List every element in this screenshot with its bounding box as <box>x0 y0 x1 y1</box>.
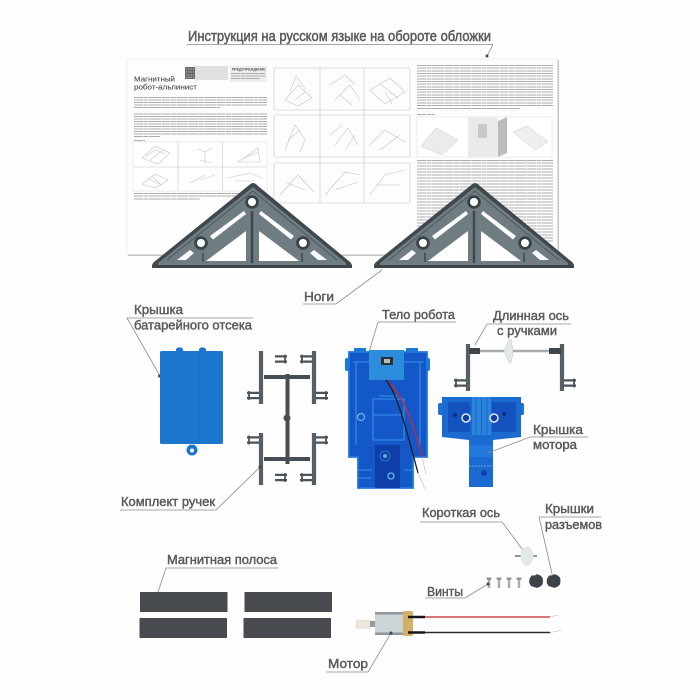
label: magnetic strip: Магнитная полоса <box>167 552 278 567</box>
title: instruction note: Инструкция на русском языке на обороте обложки <box>188 29 491 45</box>
label: robot body <box>369 307 456 352</box>
label: motor cover: мотора <box>533 437 578 452</box>
title: instruction note <box>187 29 493 58</box>
screws <box>486 578 522 588</box>
label: short axle: Короткая ось <box>422 505 500 520</box>
motor cover <box>438 397 524 487</box>
label: long axle with handles: с ручками <box>497 323 557 338</box>
sheet right column text <box>417 66 553 247</box>
label: handle set: Комплект ручек <box>121 494 215 509</box>
sheet left column text <box>134 98 267 199</box>
label: short axle <box>420 505 524 552</box>
label: motor <box>326 632 392 672</box>
label: long axle with handles: Длинная ось <box>493 308 569 323</box>
sheet title: робот-альпинист <box>134 82 198 92</box>
sheet parts grid <box>133 142 267 191</box>
sheet QR code block <box>185 66 228 80</box>
sheet control illustrations <box>417 117 552 157</box>
sheet warning box: ПРЕДУПРЕЖДЕНИЕ <box>232 68 266 72</box>
instruction sheet panel <box>127 59 559 256</box>
label: motor: Мотор <box>328 656 368 671</box>
sheet assembly steps grid <box>274 68 410 203</box>
sheet title: Магнитный <box>134 74 175 84</box>
label: legs <box>303 270 382 304</box>
label: magnetic strip <box>158 552 278 592</box>
label: battery cover: Крышка <box>134 302 184 317</box>
label: legs: Ноги <box>304 289 334 304</box>
right leg <box>374 183 574 268</box>
label: connector caps: Крышки <box>545 501 594 516</box>
handle set <box>247 351 328 485</box>
robot body <box>345 348 430 489</box>
sheet title <box>134 74 198 92</box>
sheet warning box <box>230 66 267 82</box>
connector caps <box>529 574 560 588</box>
label: connector caps: разъемов <box>545 517 602 532</box>
label: screws <box>425 582 490 599</box>
label: long axle with handles <box>475 308 571 345</box>
label: connector caps <box>539 501 602 578</box>
left leg <box>152 183 352 268</box>
magnetic strips <box>140 592 332 638</box>
label: motor cover <box>488 422 588 453</box>
short axle <box>515 546 537 566</box>
label: battery cover: батарейного отсека <box>134 318 253 332</box>
long axle with handles <box>454 339 576 391</box>
motor <box>356 611 561 636</box>
label: screws: Винты <box>427 584 463 599</box>
battery cover <box>160 348 223 456</box>
label: battery cover <box>127 302 253 378</box>
label: handle set <box>120 466 262 510</box>
label: robot body: Тело робота <box>382 307 456 322</box>
label: motor cover: Крышка <box>533 422 584 437</box>
